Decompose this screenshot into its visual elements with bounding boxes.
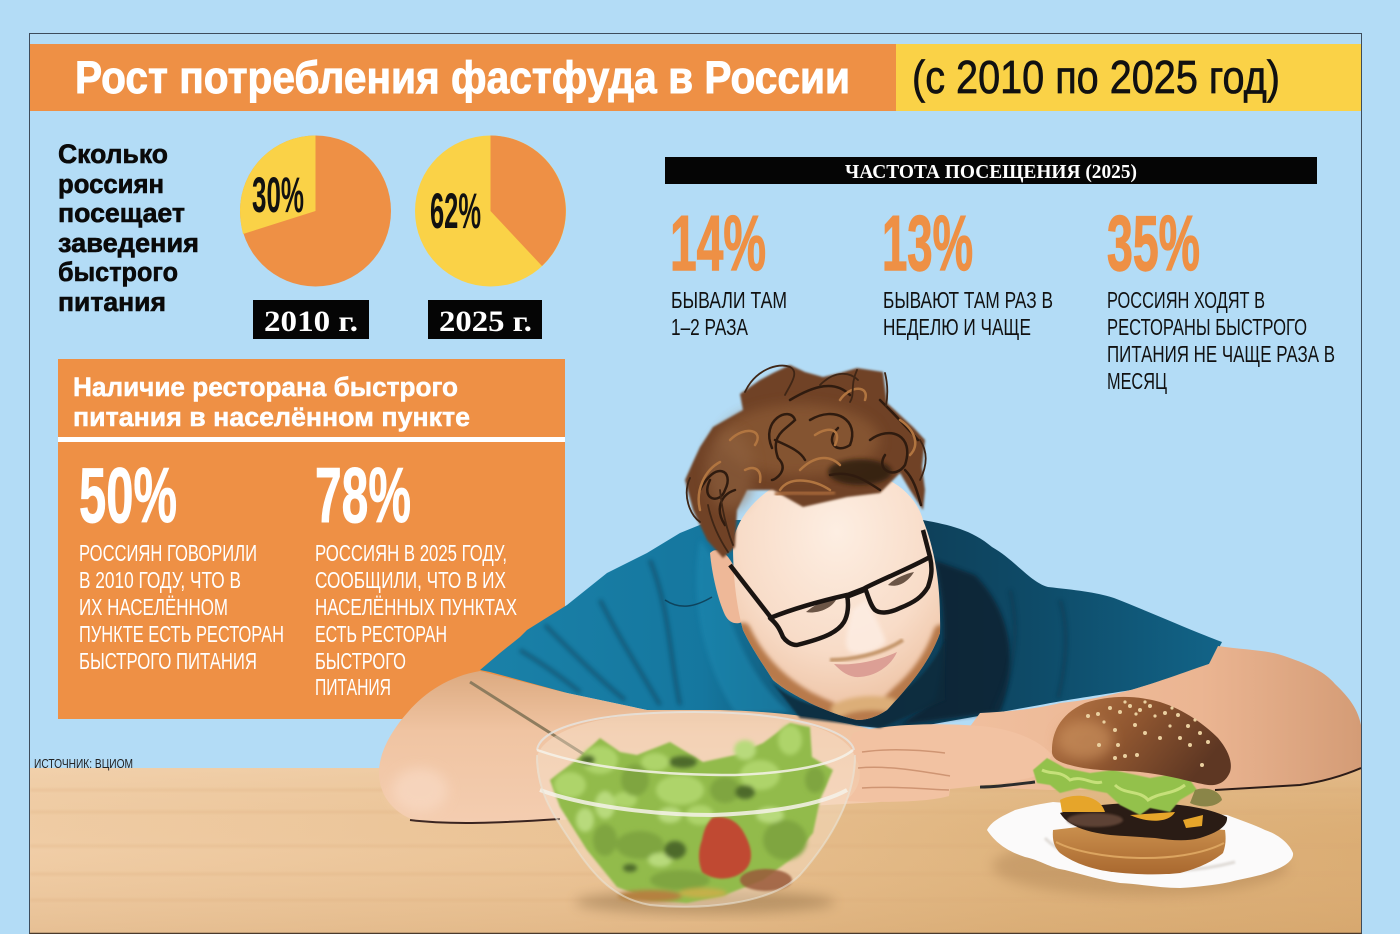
stat 50%: В 2010 ГОДУ, ЧТО В — [79, 567, 241, 593]
hands — [845, 724, 1052, 802]
stat 13%: 13% — [882, 199, 973, 287]
beard — [743, 630, 941, 718]
source note: ИСТОЧНИК: ВЦИОМ — [34, 757, 133, 771]
pie chart 2025 — [415, 136, 566, 286]
photo: man, salad and burger — [30, 365, 1361, 934]
question text: Сколько — [58, 139, 168, 169]
frequency heading bar — [665, 157, 1317, 184]
salad bowl — [536, 712, 856, 914]
stat 50%: ИХ НАСЕЛЁННОМ — [79, 594, 228, 620]
top bun — [1052, 697, 1231, 785]
lettuce mass — [550, 723, 833, 903]
mouth — [834, 652, 897, 677]
patty — [1060, 803, 1227, 840]
stat 14%: 1–2 РАЗА — [671, 314, 748, 340]
head — [710, 469, 945, 728]
question text: посещает — [58, 198, 185, 228]
stat 50%: БЫСТРОГО ПИТАНИЯ — [79, 648, 257, 674]
stat 78%: БЫСТРОГО — [315, 648, 406, 674]
stat 14%: БЫВАЛИ ТАМ — [671, 287, 787, 313]
ear — [710, 550, 741, 624]
stat 78%: ЕСТЬ РЕСТОРАН — [315, 621, 447, 647]
tomato — [699, 817, 751, 879]
left arm — [379, 671, 905, 823]
glass body — [536, 712, 856, 907]
neck shadow — [770, 640, 945, 728]
question text: россиян — [58, 169, 164, 199]
year label 2010 — [253, 300, 369, 339]
nose — [846, 600, 886, 654]
question text — [58, 139, 199, 317]
stat 35%: 35% — [1107, 199, 1200, 287]
subtitle: (с 2010 по 2025 год) — [912, 51, 1280, 103]
pie section: how many Russians visit — [58, 136, 566, 339]
question text: заведения — [58, 228, 199, 258]
year label 2025: 2025 г. — [439, 305, 532, 338]
glass rims — [537, 712, 854, 815]
stat 35%: РЕСТОРАНЫ БЫСТРОГО — [1107, 314, 1307, 340]
title bar — [30, 44, 1361, 111]
bottom bun — [1053, 822, 1226, 874]
panel heading — [73, 372, 470, 432]
pie chart 2010 — [240, 136, 391, 286]
stat 13%: НЕДЕЛЮ И ЧАЩЕ — [883, 314, 1031, 340]
right arm — [960, 646, 1361, 790]
visit frequency section — [665, 157, 1335, 394]
stat 78%: СООБЩИЛИ, ЧТО В ИХ — [315, 567, 506, 593]
question text: питания — [58, 287, 166, 317]
pie chart 2025: 62% — [430, 183, 481, 239]
stat 35%: РОССИЯН ХОДЯТ В — [1107, 287, 1265, 313]
stat 50%: ПУНКТЕ ЕСТЬ РЕСТОРАН — [79, 621, 284, 647]
stat 78%: РОССИЯН В 2025 ГОДУ, — [315, 540, 507, 566]
title: Рост потребления фастфуда в России — [75, 52, 850, 103]
year label 2010: 2010 г. — [264, 305, 358, 338]
stat 14%: 14% — [670, 199, 766, 287]
stat 78%: ПИТАНИЯ — [315, 674, 391, 700]
hair — [685, 365, 926, 558]
stat 78%: 78% — [315, 451, 411, 539]
year label 2025 — [428, 300, 542, 339]
stat 50% — [79, 451, 284, 674]
plate — [987, 802, 1293, 896]
glasses — [730, 530, 931, 645]
burger — [1033, 697, 1231, 874]
shirt folds — [520, 560, 1066, 710]
stat 50%: 50% — [79, 451, 177, 539]
cheese — [1060, 796, 1203, 828]
wooden table — [30, 768, 1361, 934]
moustache — [830, 640, 903, 660]
panel heading: Наличие ресторана быстрого — [73, 372, 458, 402]
stat 13%: БЫВАЮТ ТАМ РАЗ В — [883, 287, 1053, 313]
stat 35% — [1107, 199, 1335, 394]
question text: быстрого — [58, 257, 178, 287]
shirt shadow right of face — [900, 560, 1010, 725]
pie chart 2010: 30% — [252, 167, 304, 223]
panel heading: питания в населённом пункте — [73, 402, 470, 432]
face — [733, 469, 940, 720]
stat 14% — [670, 199, 787, 340]
lettuce — [1033, 758, 1197, 815]
fork handle — [470, 682, 585, 755]
shirt — [480, 520, 1222, 730]
stat 78%: НАСЕЛЁННЫХ ПУНКТАХ — [315, 594, 517, 620]
stat 35%: МЕСЯЦ — [1107, 368, 1167, 394]
frequency heading bar: ЧАСТОТА ПОСЕЩЕНИЯ (2025) — [845, 161, 1137, 183]
eyes — [806, 600, 836, 612]
stat 50%: РОССИЯН ГОВОРИЛИ — [79, 540, 257, 566]
panel: restaurant availability — [58, 359, 565, 719]
stat 13% — [882, 199, 1053, 340]
sesame seeds — [1086, 700, 1210, 767]
stat 78% — [315, 451, 517, 700]
